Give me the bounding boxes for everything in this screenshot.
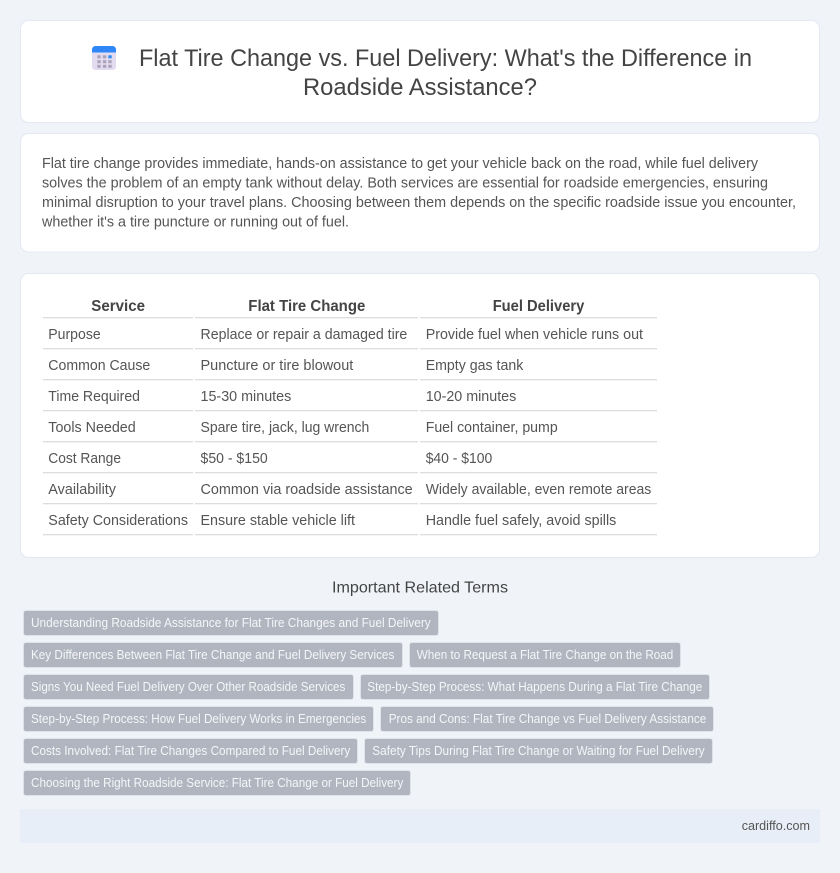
row: purpose: Provide fuel when vehicle runs out [426, 327, 643, 343]
row: tools needed [48, 420, 558, 436]
row: safety considerations [48, 513, 616, 529]
intro paragraph: minimal disruption to your travel plans. Choosing between them depends on the specific roadside issue you encounter, [42, 195, 796, 211]
tag: Choosing the Right Roadside Service: Flat Tire Change or Fuel Delivery [31, 775, 404, 790]
panel: intro text card [20, 134, 820, 252]
row: safety considerations: Safety Considerations [48, 513, 188, 529]
tag [360, 674, 710, 700]
row: cost range [48, 451, 492, 467]
tag [364, 738, 712, 764]
icon: calendar [92, 46, 116, 70]
tag [24, 706, 374, 732]
row: common cause: Empty gas tank [426, 358, 524, 374]
tag [24, 642, 402, 668]
comparison table [43, 298, 657, 535]
row: tools needed: Tools Needed [48, 420, 136, 436]
row: tools needed: Spare tire, jack, lug wrench [200, 420, 369, 436]
intro paragraph: whether it's a tire puncture or running out of fuel. [41, 214, 349, 230]
tag: Costs Involved: Flat Tire Changes Compared to Fuel Delivery [31, 743, 351, 758]
intro paragraph: Flat tire change provides immediate, hands-on assistance to get your vehicle back on the road, while fuel delivery [42, 156, 759, 172]
panel: title card [20, 20, 820, 122]
tag [24, 674, 354, 700]
row: time required [48, 389, 516, 405]
tag: Step-by-Step Process: How Fuel Delivery Works in Emergencies [31, 711, 366, 726]
row: availability: Availability [48, 482, 117, 498]
row: common cause: Puncture or tire blowout [200, 358, 353, 374]
title: Roadside Assistance? [303, 74, 537, 101]
row: safety considerations: Ensure stable vehicle lift [200, 513, 355, 529]
tag [24, 738, 358, 764]
row: time required: 10-20 minutes [426, 389, 516, 405]
row: tools needed: Fuel container, pump [426, 420, 558, 436]
tag [24, 610, 438, 636]
title [139, 45, 752, 101]
table header: Flat Tire Change [248, 298, 365, 315]
table header: Fuel Delivery [493, 298, 584, 315]
row: common cause [48, 358, 524, 374]
tag: Key Differences Between Flat Tire Change and Fuel Delivery Services [31, 647, 394, 662]
heading: important related terms: Important Related Terms [332, 580, 508, 596]
tag [380, 706, 714, 732]
table header: Service [91, 298, 145, 315]
row: purpose [48, 327, 643, 343]
title: Flat Tire Change vs. Fuel Delivery: What's the Difference in [139, 45, 752, 72]
related term tags [24, 610, 714, 796]
row: cost range: Cost Range [48, 451, 121, 467]
intro paragraph [41, 156, 796, 230]
row: purpose: Replace or repair a damaged tire [200, 327, 407, 343]
panel: comparison table card [20, 274, 820, 558]
intro paragraph: solves the problem of an empty tank without delay. Both services are essential for roadside emergencies, ensuring [42, 176, 768, 192]
tag: Signs You Need Fuel Delivery Over Other Roadside Services [31, 679, 345, 694]
row: cost range: $50 - $150 [200, 451, 268, 467]
tag: Step-by-Step Process: What Happens During a Flat Tire Change [367, 679, 702, 694]
row: availability [48, 482, 651, 498]
table header [91, 298, 584, 315]
row: cost range: $40 - $100 [426, 451, 492, 467]
row: availability: Common via roadside assistance [200, 482, 413, 498]
row: safety considerations: Handle fuel safely, avoid spills [426, 513, 616, 529]
tag [410, 642, 680, 668]
tag: When to Request a Flat Tire Change on the Road [417, 647, 673, 662]
row: time required: Time Required [48, 389, 140, 405]
footer source: cardiffo.com [742, 818, 810, 833]
row: common cause: Common Cause [48, 358, 150, 374]
footer [20, 809, 820, 843]
row: availability: Widely available, even remote areas [426, 482, 651, 498]
tag [24, 770, 410, 796]
tag: Understanding Roadside Assistance for Flat Tire Changes and Fuel Delivery [31, 615, 431, 630]
row: time required: 15-30 minutes [200, 389, 291, 405]
tag: Safety Tips During Flat Tire Change or Waiting for Fuel Delivery [372, 743, 705, 758]
row: purpose: Purpose [48, 327, 101, 343]
tag: Pros and Cons: Flat Tire Change vs Fuel Delivery Assistance [389, 711, 706, 726]
